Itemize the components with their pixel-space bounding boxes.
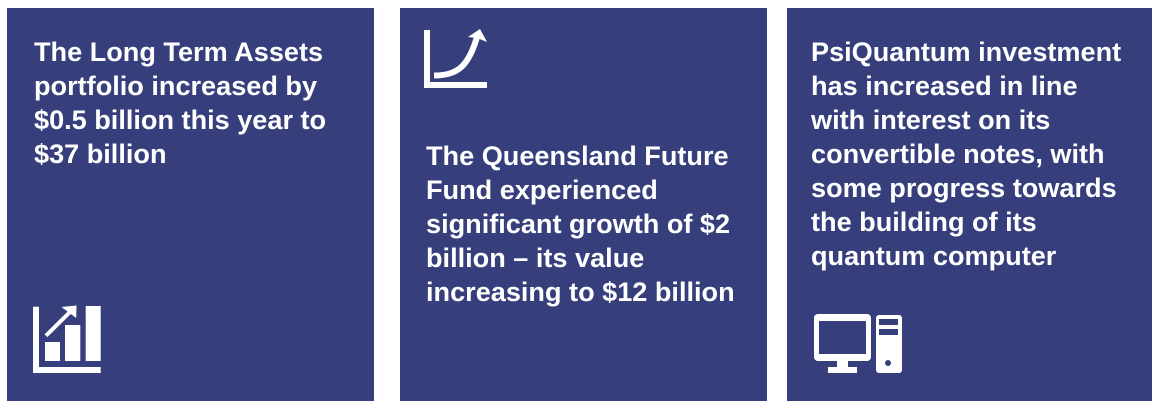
text: psiquantum investment (810, 36, 1121, 271)
text: long term assets portfolio (34, 36, 326, 169)
text: queensland future fund growth: significant growth of $2 (426, 208, 730, 239)
panel: queensland future fund (400, 8, 767, 401)
text: psiquantum investment: convertible notes, with (811, 138, 1105, 169)
text: queensland future fund growth (426, 140, 735, 307)
panel: long term assets (7, 8, 374, 401)
icon: bar chart with arrow (33, 306, 101, 373)
text: long term assets portfolio: portfolio increased by (34, 70, 317, 101)
text: psiquantum investment: has increased in line (811, 70, 1078, 101)
text: psiquantum investment: PsiQuantum investment (811, 36, 1121, 67)
text: queensland future fund growth: The Queensland Future (426, 140, 729, 171)
text: queensland future fund growth: Fund experienced (426, 174, 658, 205)
icon: desktop computer (814, 314, 902, 373)
text: long term assets portfolio: The Long Term Assets (34, 36, 323, 67)
panel: psiquantum (787, 8, 1152, 401)
text: queensland future fund growth: billion – its value (426, 242, 644, 273)
text: queensland future fund growth: increasing to $12 billion (426, 276, 735, 307)
text: psiquantum investment: the building of its (811, 206, 1037, 237)
text: psiquantum investment: some progress towards (811, 172, 1117, 203)
text: long term assets portfolio: $37 billion (34, 138, 166, 169)
text: long term assets portfolio: $0.5 billion this year to (34, 104, 326, 135)
text: psiquantum investment: with interest on its (811, 104, 1050, 135)
text: psiquantum investment: quantum computer (811, 240, 1056, 271)
icon: growth curve (424, 29, 487, 88)
